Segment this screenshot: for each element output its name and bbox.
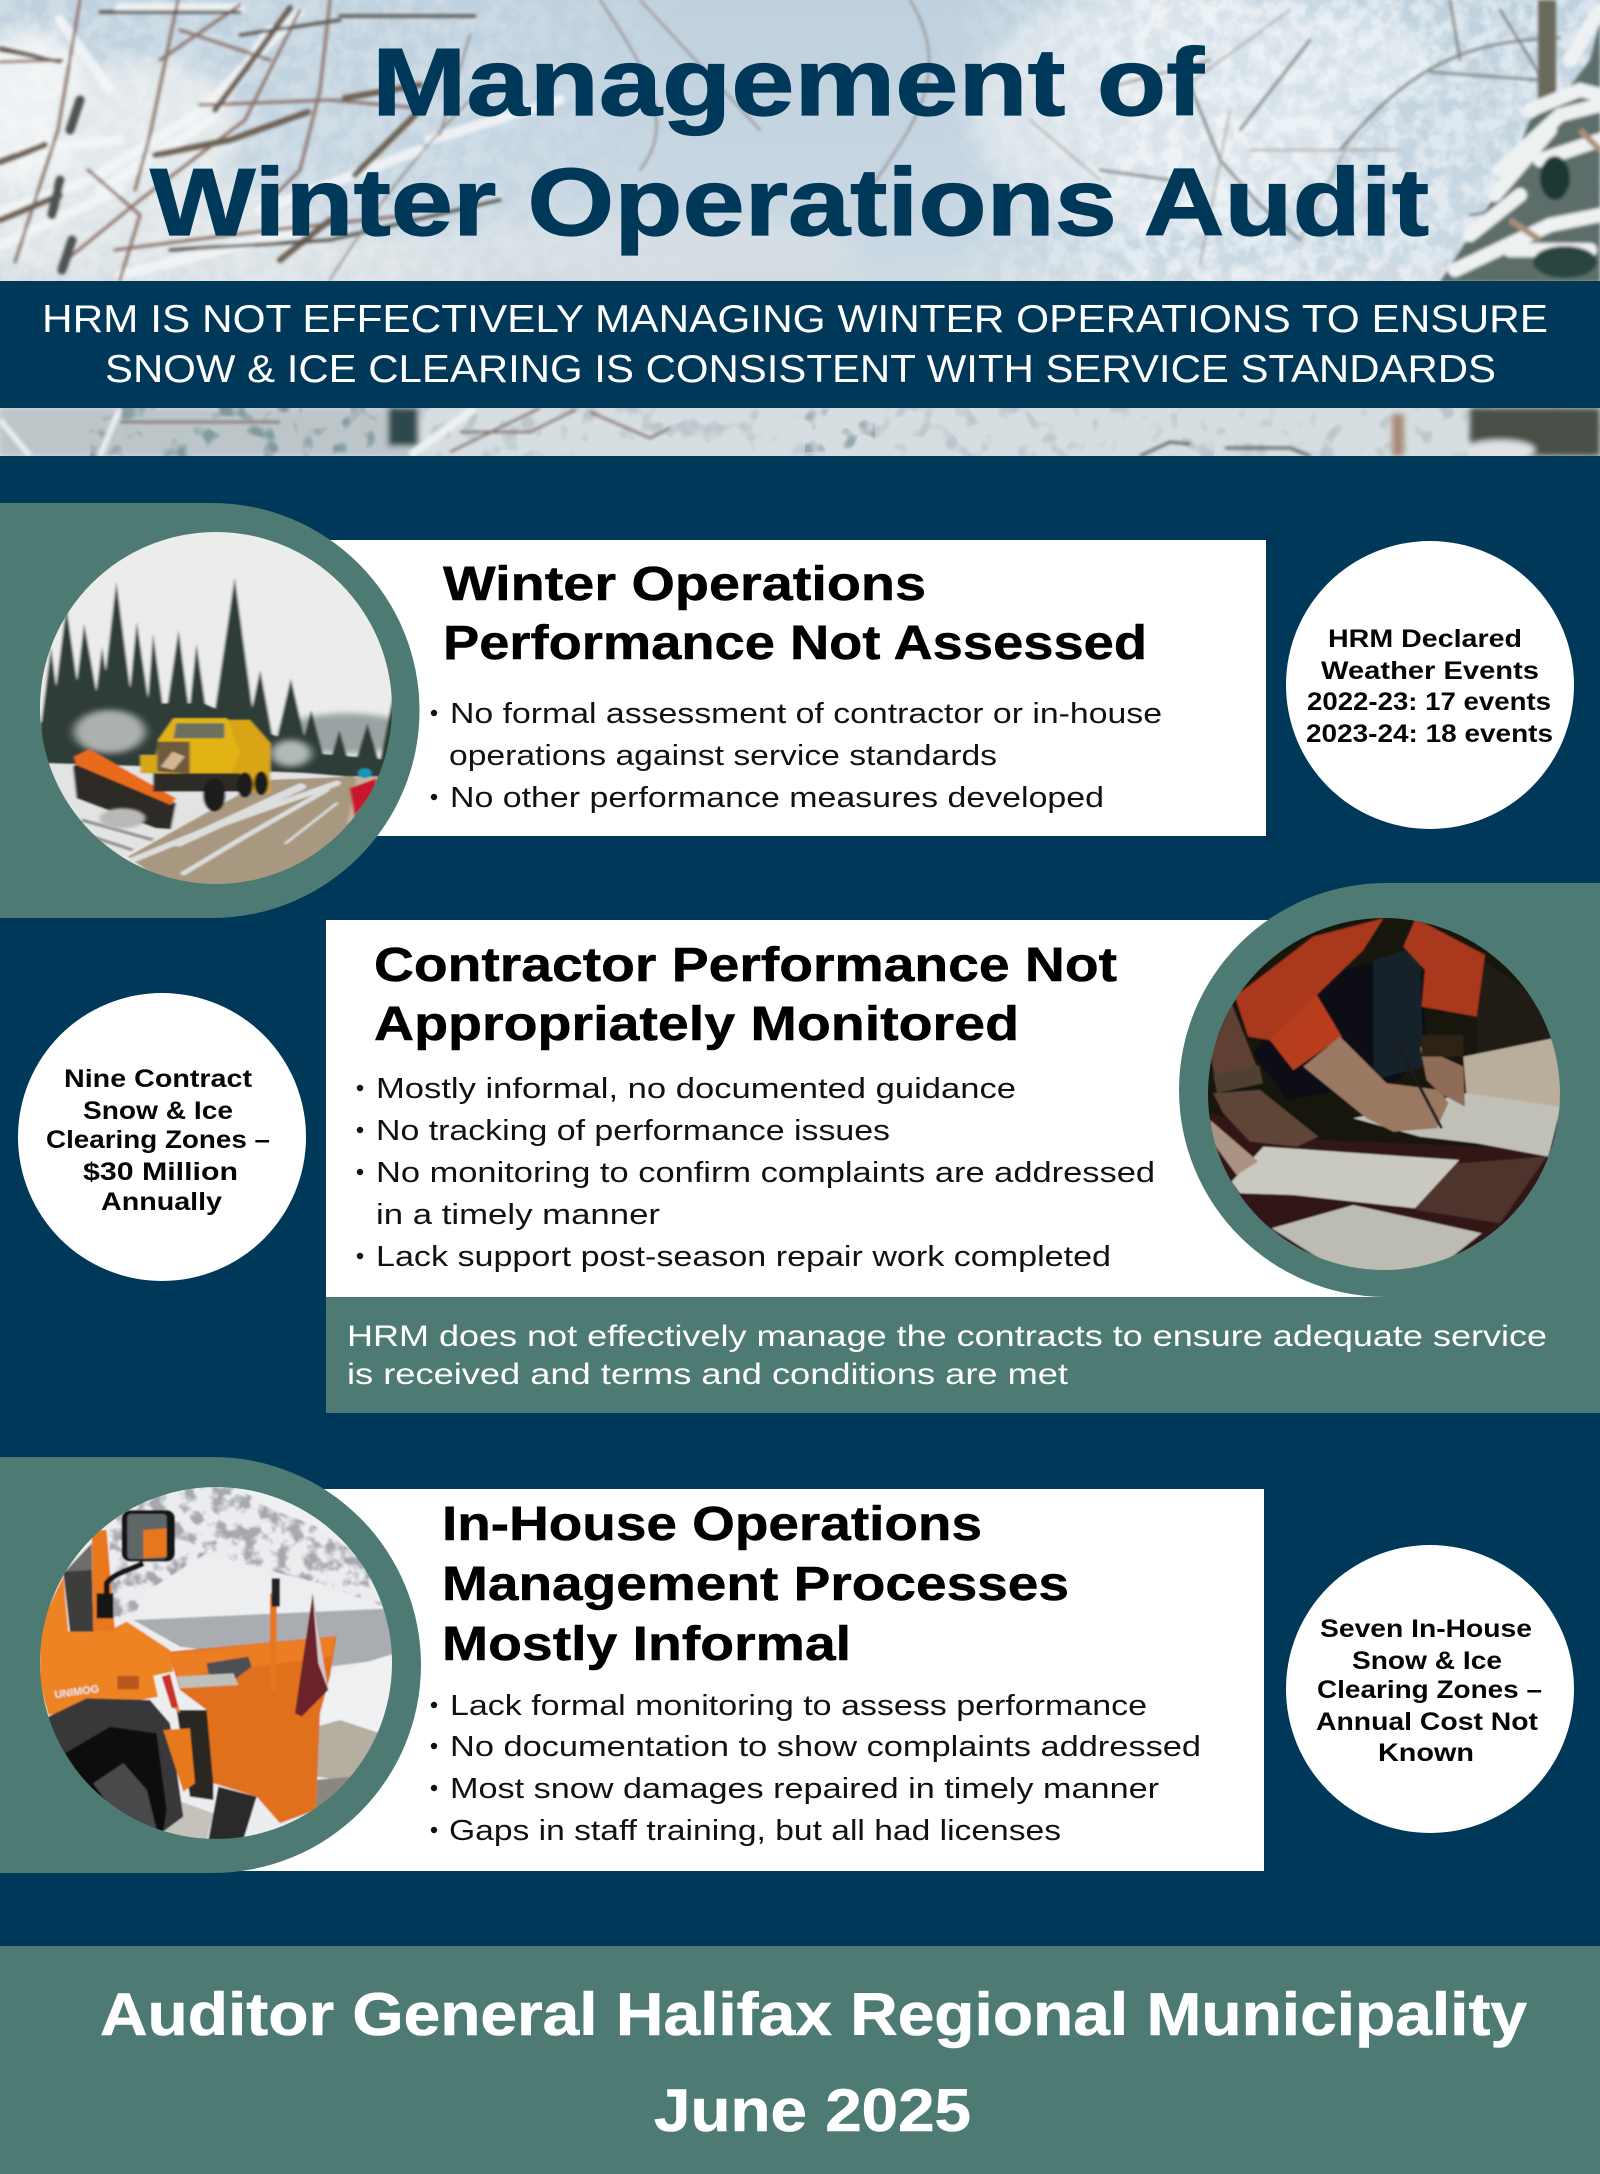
truck — [227, 720, 270, 793]
bullet list: No other performance measures developed — [450, 782, 1104, 814]
footer — [0, 1946, 1600, 2174]
callout: weather events: HRM Declared — [1328, 625, 1522, 653]
photo: orange plow vehicle — [33, 1483, 400, 1847]
callout: in-house zones: Clearing Zones – — [1317, 1676, 1542, 1704]
bullet list: No tracking of performance issues — [376, 1115, 890, 1147]
bullet list: Lack support post-season repair work completed — [376, 1241, 1111, 1273]
header photo: snowy branches — [0, 0, 1600, 460]
bullet list: Mostly informal, no documented guidance — [376, 1073, 1016, 1105]
bullet list: Lack formal monitoring to assess performance — [450, 1690, 1147, 1722]
teal photo holder — [1179, 883, 1600, 1297]
cab — [39, 1577, 180, 1715]
person in red — [349, 778, 377, 817]
panel background — [330, 540, 1266, 836]
footer: June 2025 — [654, 2077, 971, 2144]
heading — [442, 1498, 1069, 1671]
plow — [73, 760, 176, 829]
heading: Management Processes — [442, 1558, 1069, 1611]
callout: contract zones — [18, 993, 306, 1281]
bullet list: Gaps in staff training, but all had licenses — [449, 1815, 1061, 1847]
bullet list — [431, 698, 1162, 814]
callout: contract zones: Annually — [101, 1188, 222, 1216]
bullet list — [431, 1690, 1201, 1847]
heading — [374, 939, 1117, 1051]
footer: Auditor General Halifax Regional Municipality — [100, 1981, 1528, 2048]
photo: orange plow vehicle: UNIMOG — [54, 1683, 100, 1701]
panel background — [240, 1489, 1264, 1871]
panel: in-house operations — [0, 1457, 1264, 1873]
conclusion strip: HRM does not effectively manage the contracts to ensure adequate service — [347, 1320, 1547, 1353]
red sleeves — [1235, 918, 1383, 1070]
title — [150, 29, 1429, 256]
scraper — [208, 1787, 257, 1840]
title: Winter Operations Audit — [150, 149, 1429, 256]
callout: in-house zones — [1286, 1545, 1574, 1833]
subtitle banner: SNOW & ICE CLEARING IS CONSISTENT WITH SERVICE STANDARDS — [105, 348, 1496, 391]
callout: weather events: Weather Events — [1321, 657, 1539, 685]
photo: snow plow truck on road — [40, 532, 392, 884]
title: Management of — [372, 29, 1205, 136]
conclusion strip — [326, 1297, 1600, 1413]
callout: weather events: 2022-23: 17 events — [1307, 688, 1551, 716]
heading: Contractor Performance Not — [374, 939, 1117, 992]
arms and hands — [1303, 1037, 1448, 1132]
bullet list: in a timely manner — [376, 1199, 660, 1231]
callout: contract zones: $30 Million — [83, 1158, 238, 1186]
heading: Performance Not Assessed — [443, 617, 1147, 670]
conclusion strip: is received and terms and conditions are met — [347, 1358, 1069, 1391]
heading: Mostly Informal — [442, 1618, 851, 1671]
heading — [443, 558, 1147, 670]
teal photo holder — [0, 503, 420, 918]
teal photo holder — [0, 1457, 421, 1873]
mirror — [122, 1510, 175, 1562]
flag — [295, 1593, 328, 1717]
callout: in-house zones: Snow & Ice — [1352, 1647, 1502, 1675]
orange plow blade — [168, 1636, 337, 1823]
heading: In-House Operations — [442, 1498, 982, 1551]
bullet list — [357, 1073, 1155, 1273]
bullet list: operations against service standards — [449, 740, 997, 772]
subtitle banner — [0, 281, 1600, 408]
bullet list: No monitoring to confirm complaints are addressed — [376, 1157, 1155, 1189]
panel background — [326, 920, 1386, 1297]
bullet list: No documentation to show complaints addressed — [450, 1731, 1201, 1763]
right snowy pine — [1440, 0, 1600, 282]
callout: weather events — [1286, 541, 1574, 829]
photo: hands signing documents — [1200, 913, 1567, 1277]
callout: in-house zones: Seven In-House — [1320, 1615, 1532, 1643]
heading: Winter Operations — [443, 558, 926, 611]
fender and wheel — [33, 1698, 183, 1840]
lower strip of frosted trees — [0, 408, 1600, 456]
callout: in-house zones: Known — [1378, 1739, 1474, 1767]
panel: contractor performance — [326, 883, 1600, 1413]
heading: Appropriately Monitored — [374, 998, 1019, 1051]
callout: weather events: 2023-24: 18 events — [1306, 720, 1553, 748]
callout: contract zones: Clearing Zones – — [46, 1126, 270, 1154]
callout: contract zones: Nine Contract — [64, 1065, 253, 1093]
panel: winter operations performance — [0, 503, 1266, 918]
bullet list: No formal assessment of contractor or in-house — [450, 698, 1162, 730]
callout: in-house zones: Annual Cost Not — [1316, 1708, 1539, 1736]
subtitle banner: HRM IS NOT EFFECTIVELY MANAGING WINTER OPERATIONS TO ENSURE — [42, 298, 1548, 341]
callout: contract zones: Snow & Ice — [83, 1097, 233, 1125]
bullet list: Most snow damages repaired in timely manner — [450, 1773, 1159, 1805]
